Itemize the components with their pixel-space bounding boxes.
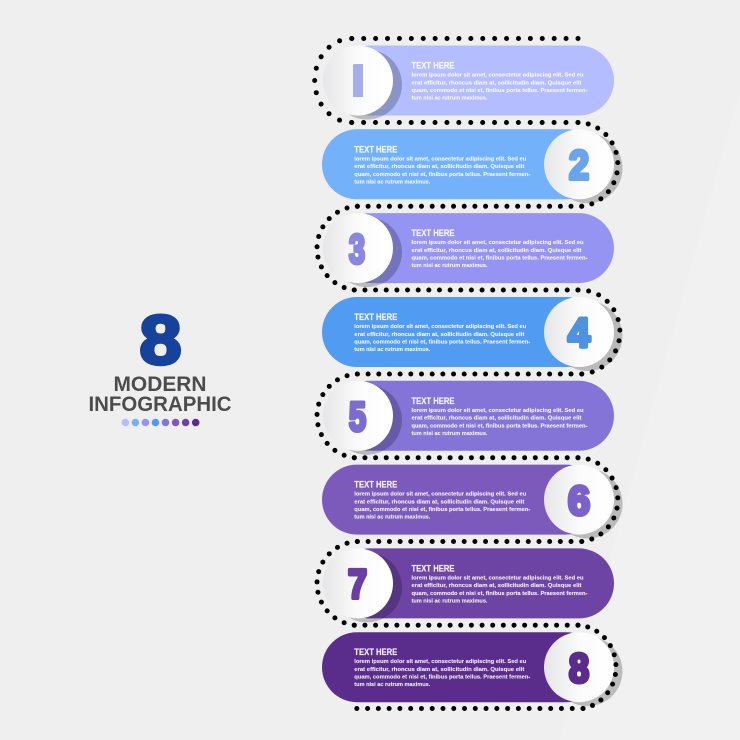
circle shadow [552,301,622,371]
text block: TEXT HERE [412,60,454,70]
circle shadow [332,217,402,287]
panel: step 1 [315,38,614,122]
pill background [335,46,614,116]
panel: step 3 [317,206,614,290]
number circle [544,129,614,199]
text block: erat efficitur, rhoncus diam at, sollicitudin diam. Quisque elit [412,416,582,422]
text block: lorem ipsum dolor sit amet, consectetur adipiscing elit. Sed eu [412,240,584,246]
circle shadow [552,636,622,706]
circle shadow [332,552,402,622]
number circle [544,465,614,535]
circle shadow [552,469,622,539]
pill background [335,213,614,283]
text block: quam, commodo et nisi et, finibus porta tellus. Praesent fermen- [412,256,588,262]
pill background [322,465,601,535]
colour dot row [122,419,200,426]
dotted outline [315,38,578,122]
pill background [322,632,601,702]
number circle [323,381,393,451]
number: 1 [347,59,369,105]
text block: lorem ipsum dolor sit amet, consectetur adipiscing elit. Sed eu [412,575,584,581]
text block: TEXT HERE [412,228,454,238]
text block: quam, commodo et nisi et, finibus porta tellus. Praesent fermen- [412,423,588,429]
text block [354,480,530,521]
text block: tum nisi ac rutrum maximus. [354,515,431,521]
text block: lorem ipsum dolor sit amet, consectetur adipiscing elit. Sed eu [354,324,527,330]
dotted outline [578,458,618,542]
dotted outline [357,625,616,708]
text block [412,228,588,269]
text block [354,312,530,353]
text block: erat efficitur, rhoncus diam at, sollicitudin diam. Quisque elit [412,80,582,86]
text block: lorem ipsum dolor sit amet, consectetur adipiscing elit. Sed eu [354,659,527,665]
dotted outline [578,122,618,206]
text block: TEXT HERE [354,312,397,322]
pill background [322,297,601,367]
heading: infographic: INFOGRAPHIC [88,393,232,416]
text block: erat efficitur, rhoncus diam at, sollicitudin diam. Quisque elit [412,248,582,254]
text block [412,563,588,604]
text block: quam, commodo et nisi et, finibus porta tellus. Praesent fermen- [354,340,530,346]
number: 8 [569,645,589,691]
text block: tum nisi ac rutrum maximus. [412,431,488,437]
text block: lorem ipsum dolor sit amet, consectetur adipiscing elit. Sed eu [354,156,527,162]
text block: lorem ipsum dolor sit amet, consectetur adipiscing elit. Sed eu [354,492,527,498]
circle shadow [552,133,622,203]
text block: TEXT HERE [354,480,397,490]
pill background [322,129,601,199]
text block: tum nisi ac rutrum maximus. [412,598,488,604]
text block: tum nisi ac rutrum maximus. [354,682,431,688]
circle shadow [332,385,402,455]
circle shadow [332,50,402,120]
text block: tum nisi ac rutrum maximus. [412,263,488,269]
pill background [335,548,614,618]
text block [412,396,588,437]
text block: quam, commodo et nisi et, finibus porta tellus. Praesent fermen- [354,507,530,513]
panel: step 7 [317,542,614,625]
text block: erat efficitur, rhoncus diam at, sollicitudin diam. Quisque elit [412,583,582,589]
text block: erat efficitur, rhoncus diam at, sollicitudin diam. Quisque elit [354,667,524,673]
text block: quam, commodo et nisi et, finibus porta tellus. Praesent fermen- [354,675,530,681]
text block: quam, commodo et nisi et, finibus porta tellus. Praesent fermen- [412,591,588,597]
dotted outline [317,206,582,290]
title block [88,301,232,426]
number: 5 [349,394,366,440]
number circle [323,46,393,116]
text block: erat efficitur, rhoncus diam at, sollicitudin diam. Quisque elit [354,164,524,170]
number: 6 [568,477,590,523]
heading: modern: MODERN [114,373,206,396]
panel: step 5 [317,374,614,458]
text block: TEXT HERE [354,144,397,154]
panel: step 4 [322,290,622,374]
text block [412,60,588,102]
text block [354,144,530,185]
text block [354,647,530,688]
number: 3 [349,226,365,272]
text block: tum nisi ac rutrum maximus. [354,347,431,353]
number circle [544,632,614,702]
text block: quam, commodo et nisi et, finibus porta tellus. Praesent fermen- [412,88,588,94]
dotted outline [317,374,582,458]
text block: lorem ipsum dolor sit amet, consectetur adipiscing elit. Sed eu [412,72,584,78]
text block: TEXT HERE [412,396,454,406]
number: 4 [568,310,590,356]
dotted outline [578,290,620,374]
panel: step 6 [322,458,622,542]
text block: TEXT HERE [412,563,454,573]
number: 7 [348,561,367,607]
text block: tum nisi ac rutrum maximus. [412,96,488,102]
big number 8: 8 [140,301,182,379]
text block: erat efficitur, rhoncus diam at, sollicitudin diam. Quisque elit [354,499,524,505]
text block: erat efficitur, rhoncus diam at, sollicitudin diam. Quisque elit [354,332,524,338]
text block: lorem ipsum dolor sit amet, consectetur adipiscing elit. Sed eu [412,408,584,414]
text block: quam, commodo et nisi et, finibus porta tellus. Praesent fermen- [354,172,530,178]
text block: TEXT HERE [354,647,397,657]
dotted outline [317,542,582,625]
pill background [335,381,614,451]
number circle [323,548,393,618]
number: 2 [569,142,589,188]
number circle [544,297,614,367]
number circle [323,213,393,283]
panel: step 8 [322,625,622,708]
panel: step 2 [322,122,622,206]
text block: tum nisi ac rutrum maximus. [354,179,431,185]
